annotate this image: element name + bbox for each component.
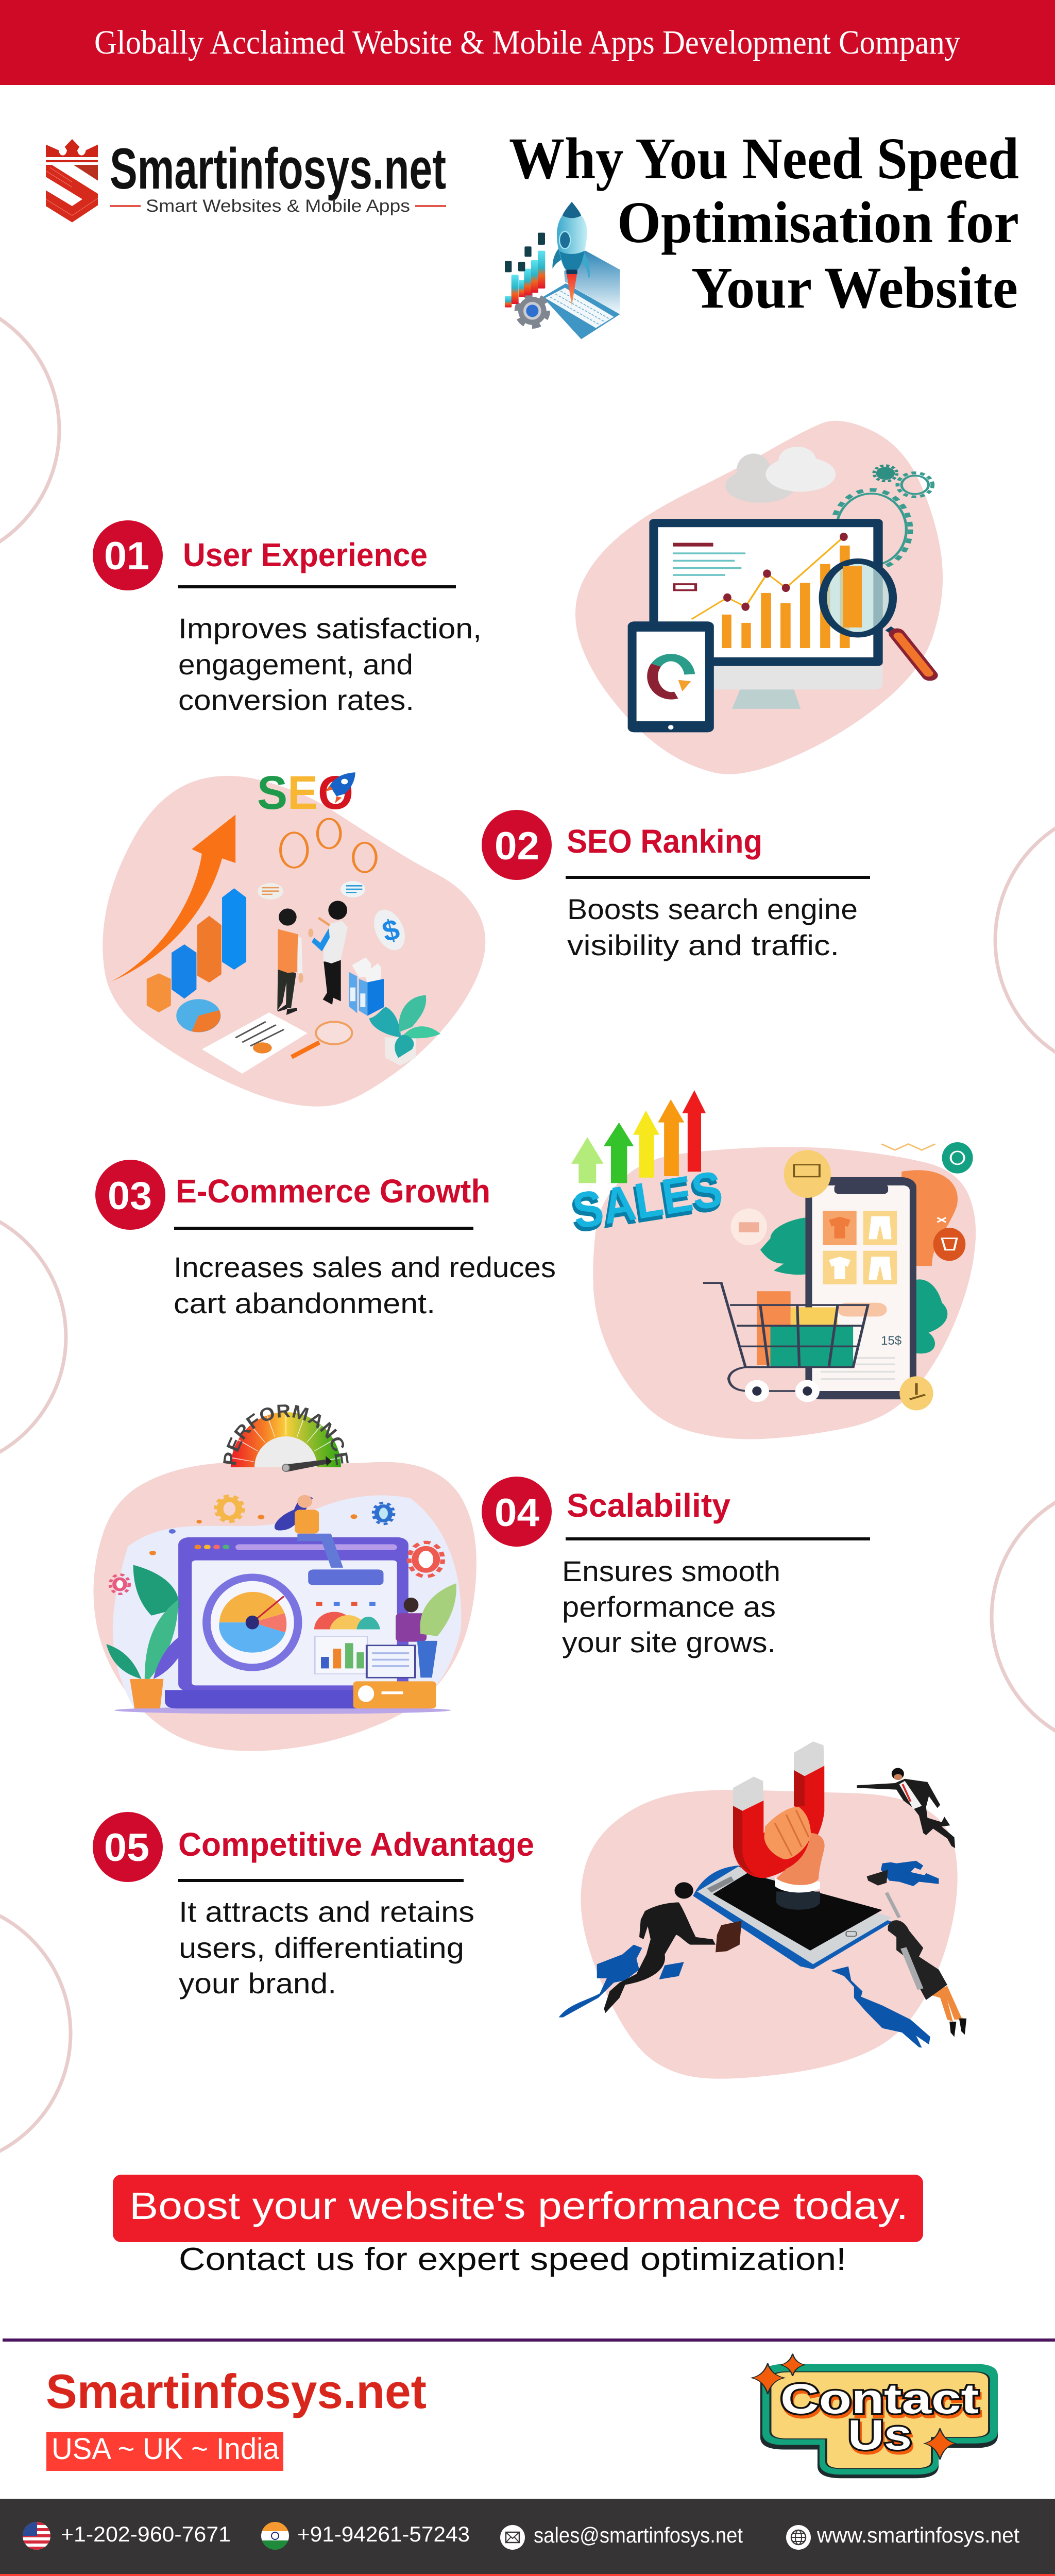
people, folders, coin and plant — [258, 881, 440, 1065]
illustration: SEO growth — [103, 767, 485, 1107]
number badge 04: 04 — [495, 1491, 539, 1535]
footer wordmark: Smartinfosys.net — [46, 2364, 427, 2418]
performance gauge: PERFORMANCE — [223, 1404, 349, 1465]
sales arrows — [571, 1090, 706, 1183]
logo tagline: Smart Websites & Mobile Apps — [146, 196, 410, 216]
decorative arc: right 2 — [995, 806, 1055, 1074]
footer brand — [46, 2364, 427, 2471]
sparkle stars — [752, 2353, 956, 2460]
main title — [509, 126, 1019, 320]
services bar — [0, 2574, 1055, 2576]
icon: seo rocket — [325, 772, 355, 803]
icon: rocket over laptop — [505, 202, 620, 339]
heading: e-commerce growth: E-Commerce Growth — [176, 1173, 490, 1210]
heading: scalability: Scalability — [567, 1487, 730, 1524]
panel: 05 competitive advantage — [93, 1741, 966, 2079]
top banner — [0, 0, 1055, 85]
number badge 05: 05 — [104, 1826, 149, 1870]
body text 05: It attracts and retains — [179, 1895, 474, 1928]
pink blob — [581, 1790, 958, 2079]
illustration: magnet attracting people — [559, 1741, 966, 2079]
illustration: analytics monitor — [575, 421, 943, 774]
body text 05: users, differentiating — [179, 1931, 464, 1964]
body text 01: engagement, and — [178, 648, 413, 681]
body text 01 — [178, 612, 482, 716]
badge label: us: Us — [848, 2412, 912, 2459]
cta subline: Contact us for expert speed optimization! — [179, 2242, 846, 2277]
heading: competitive advantage: Competitive Advantage — [178, 1826, 534, 1863]
body text 01: Improves satisfaction, — [178, 612, 482, 645]
person right and shadows — [831, 1861, 966, 2048]
body text 03 — [174, 1251, 556, 1319]
phone india: +91-94261-57243 — [297, 2522, 470, 2546]
number badge 04 — [482, 1477, 552, 1547]
main title: Optimisation for — [617, 190, 1019, 255]
body text 04: performance as — [562, 1590, 776, 1623]
cta headline: Boost your website's performance today. — [129, 2184, 908, 2227]
number badge 01: 01 — [104, 534, 149, 578]
decorative arc: right 4 — [992, 1483, 1055, 1751]
body text 04 — [562, 1555, 780, 1658]
phone usa: +1-202-960-7671 — [61, 2522, 231, 2546]
body text 02 — [567, 893, 858, 961]
panel: 03 e-commerce growth — [95, 1090, 976, 1439]
body text 04: your site grows. — [562, 1626, 776, 1658]
logo wordmark: Smartinfosys.net — [110, 137, 446, 201]
SALES wordmark: SALES — [569, 1160, 726, 1240]
contact us badge — [752, 2353, 998, 2478]
body text 01: conversion rates. — [178, 684, 414, 716]
panel: 02 SEO ranking — [103, 767, 870, 1107]
body text 02: visibility and traffic. — [567, 929, 839, 961]
illustration: performance dashboard — [94, 1404, 477, 1751]
contact bar — [0, 2499, 1055, 2574]
website: www.smartinfosys.net — [816, 2523, 1019, 2547]
heading: seo ranking: SEO Ranking — [567, 823, 762, 860]
body text 05 — [179, 1895, 474, 1999]
panel: 04 scalability — [94, 1404, 870, 1751]
call to action — [113, 2175, 923, 2277]
number badge 02 — [482, 810, 552, 880]
icon: shield logo — [46, 139, 98, 223]
SEO wordmark: SEO — [257, 767, 353, 819]
badge label: us: Us — [849, 2415, 913, 2462]
number badge 05 — [93, 1812, 163, 1882]
body text 04: Ensures smooth — [562, 1555, 780, 1587]
badge label: contact: Contact — [782, 2379, 980, 2426]
person top right — [857, 1768, 955, 1848]
locations tag: USA ~ UK ~ India — [52, 2432, 280, 2466]
illustration: shopping cart and phone — [567, 1090, 976, 1439]
banner tagline: Globally Acclaimed Website & Mobile Apps Development Company — [94, 24, 960, 61]
email: sales@smartinfosys.net — [534, 2523, 743, 2547]
decorative arc: left 5 — [0, 1901, 71, 2166]
icon: mail — [500, 2525, 525, 2550]
number badge 03: 03 — [108, 1174, 152, 1218]
body text 03: cart abandonment. — [174, 1287, 435, 1319]
number badge 01 — [93, 520, 163, 590]
number badge 02: 02 — [495, 824, 539, 868]
people, folders, coin and plant: $ — [379, 913, 403, 948]
main title: Your Website — [691, 255, 1018, 320]
body text 03: Increases sales and reduces — [174, 1251, 556, 1283]
SALES wordmark: SALES — [567, 1163, 725, 1243]
phone price label: 15$ — [881, 1334, 901, 1348]
person left — [559, 1882, 742, 2018]
icon: usa flag — [23, 2522, 50, 2550]
cta banner — [113, 2175, 923, 2242]
decorative arc: left 3 — [0, 1204, 66, 1470]
icon: india flag — [261, 2522, 289, 2550]
body text 02: Boosts search engine — [567, 893, 858, 925]
main title: Why You Need Speed — [509, 126, 1019, 191]
body text 05: your brand. — [179, 1967, 336, 1999]
badge label: contact: Contact — [780, 2376, 979, 2422]
icon: globe — [786, 2525, 811, 2550]
panel: 01 user experience — [93, 421, 943, 774]
decorative arc: left 1 — [0, 296, 59, 564]
number badge 03 — [95, 1160, 165, 1230]
heading: user experience: User Experience — [183, 536, 428, 573]
company logo — [46, 137, 446, 223]
